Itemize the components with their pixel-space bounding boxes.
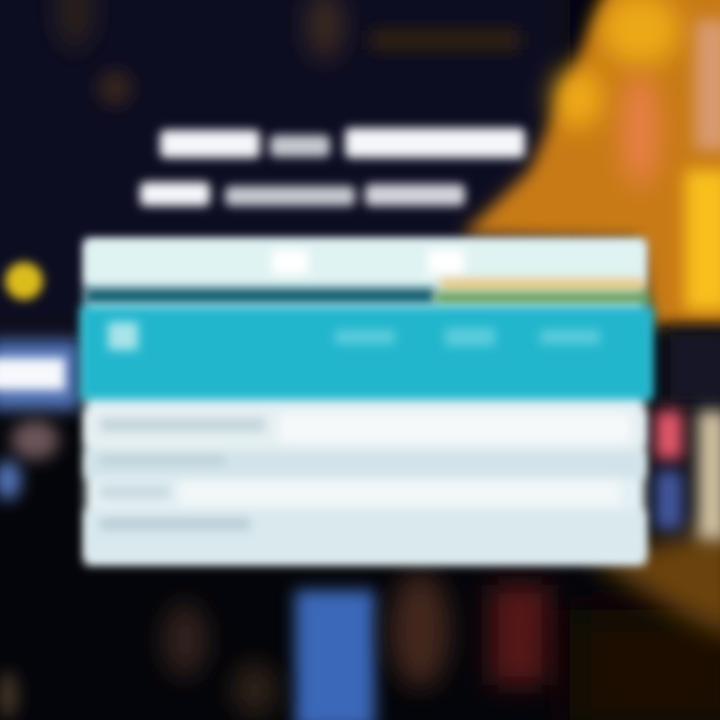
header labels <box>108 322 600 350</box>
table rows <box>85 410 645 560</box>
left side light and banner <box>0 262 80 500</box>
title (illegible in reference) <box>140 128 525 206</box>
panel base <box>85 240 645 565</box>
teal header band <box>80 306 654 400</box>
top header row <box>85 240 645 290</box>
right side orange and yellow lights <box>462 0 720 540</box>
dark strip <box>85 288 435 304</box>
table panel <box>80 240 654 565</box>
